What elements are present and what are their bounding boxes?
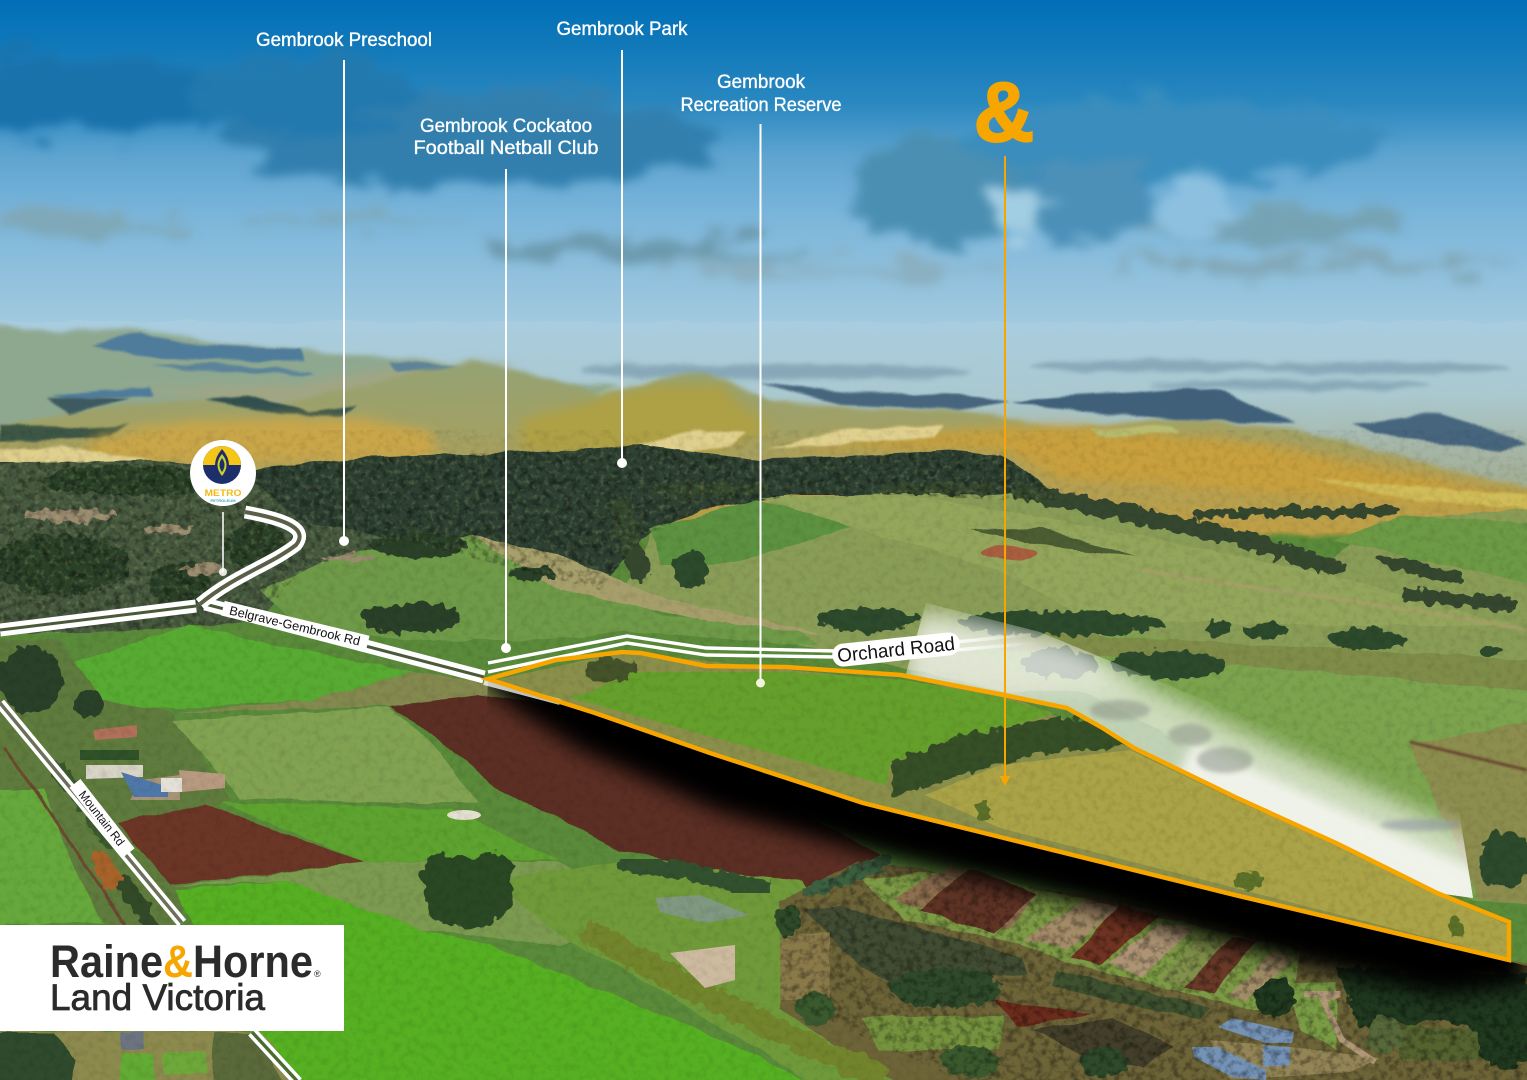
creek lines	[1140, 570, 1527, 770]
site boundary outline	[488, 652, 1509, 960]
right upper paddock	[1335, 515, 1527, 585]
brown field small	[118, 805, 364, 885]
lower right pasture	[960, 633, 1527, 905]
roadside trees	[60, 770, 150, 922]
garden texture	[780, 850, 1527, 1080]
callout: Gembrook Recreation Reserve: Recreation Reserve	[680, 95, 842, 116]
poplar tree line	[585, 928, 885, 1078]
south land under logo	[0, 1031, 300, 1080]
logo subtitle: Land Victoria	[50, 977, 265, 1018]
logo registered mark: ®	[314, 969, 321, 979]
black shadow under site boundary	[460, 650, 1527, 995]
nursery base ground	[780, 860, 1527, 1080]
Metro Petroleum pin	[190, 440, 256, 576]
olive band between fields	[171, 862, 640, 945]
distant forest	[240, 445, 1060, 590]
bright golden ridge	[70, 385, 1527, 510]
icon: Metro Petroleum logo: PETROLEUM	[210, 498, 236, 503]
plot trees	[584, 658, 1463, 936]
sky	[0, 0, 1527, 345]
striped crop beds	[894, 865, 1294, 1000]
dark trees lower right	[775, 905, 1527, 1078]
pasture lighter band	[760, 494, 1510, 625]
farm buildings	[1192, 1018, 1294, 1080]
fogged trees inside white fade	[1090, 700, 1460, 831]
white fade above site boundary	[905, 603, 1480, 905]
distant haze plains	[0, 322, 1527, 532]
plot olive paddock	[925, 750, 1508, 958]
callout: Gembrook Preschool	[256, 30, 432, 546]
village trees and houses	[0, 465, 558, 718]
Raine & Horne ampersand marker with arrow: &	[974, 65, 1034, 159]
south west field	[0, 790, 104, 925]
plot fence strip	[495, 652, 1510, 960]
south left trees	[0, 1033, 75, 1080]
golden foothills	[0, 362, 1527, 535]
callout: Gembrook Recreation Reserve: Gembrook	[717, 72, 805, 93]
north curve road	[200, 512, 300, 604]
right hillside pasture	[620, 492, 1527, 700]
bright green paddock	[45, 625, 412, 712]
fine photo grain	[0, 430, 1527, 1080]
green strip around crop beds	[861, 870, 1300, 1010]
forest canopy texture	[0, 446, 1056, 634]
green paddock centre	[650, 500, 860, 565]
distant land and foothills	[0, 322, 1527, 535]
tree line by brown field	[805, 858, 890, 892]
hill shadows left	[50, 331, 460, 400]
rolling field behind road	[260, 535, 820, 645]
far left hills	[0, 325, 620, 440]
strip along Belgrave road	[170, 625, 570, 712]
icon: Metro Petroleum logo	[203, 446, 242, 503]
south shed	[120, 1032, 143, 1049]
road label: Mountain Rd: Mountain Rd	[76, 788, 127, 849]
clouds	[0, 55, 1510, 277]
dark ploughed slot	[970, 528, 1135, 556]
terrain fields	[0, 445, 1527, 1080]
callout: Gembrook Cockatoo Football Netball Club	[414, 116, 598, 653]
fawn corner paddock	[1410, 720, 1527, 905]
pale paddocks	[0, 425, 1527, 510]
tree belt on the ridge	[620, 488, 1510, 605]
dam	[655, 895, 750, 923]
blue hill	[1012, 388, 1295, 423]
callout: Gembrook Cockatoo Football Netball Club: Gembrook Cockatoo	[420, 116, 592, 137]
west road	[0, 606, 196, 630]
bright green lower field	[175, 880, 815, 1080]
road label: Orchard Road: Orchard Road	[836, 634, 956, 667]
callout: Gembrook Park: Gembrook Park	[556, 19, 688, 40]
callout: Gembrook Recreation Reserve	[680, 72, 842, 688]
Belgrave-Gembrook Rd road line	[205, 604, 560, 702]
nursery rows	[804, 907, 1480, 1067]
upper right pasture band	[1000, 630, 1527, 692]
Orchard Road line	[488, 634, 1035, 672]
roadside track	[4, 747, 125, 923]
road label: Mountain Rd	[69, 779, 135, 857]
logo panel: Raine & Horne Land Victoria	[0, 925, 344, 1031]
callout: Gembrook Cockatoo Football Netball Club: Football Netball Club	[414, 138, 598, 159]
tree clumps right field	[672, 552, 1527, 888]
large tree clump	[420, 852, 514, 929]
west strip ground	[0, 640, 230, 930]
hill shadows mid	[0, 383, 1527, 452]
callout: Gembrook Preschool: Gembrook Preschool	[256, 30, 432, 51]
south small fields	[120, 1053, 155, 1080]
mid green paddock	[221, 803, 560, 862]
logo wordmark: Raine&Horne	[50, 936, 313, 987]
south central field	[490, 860, 1000, 1080]
Mountain Rd road line	[0, 703, 298, 1080]
south small field two	[163, 1050, 207, 1075]
tan slopes	[120, 365, 520, 420]
village hillside	[0, 460, 480, 635]
west paddock	[171, 707, 479, 803]
small dam	[447, 810, 481, 820]
tree line by dam	[620, 862, 770, 890]
farm yard	[1210, 1040, 1380, 1080]
road label: Belgrave-Gembrook Rd: Belgrave-Gembrook Rd	[228, 604, 362, 648]
callout: Gembrook Park	[556, 19, 688, 468]
brown field big	[390, 695, 880, 895]
Raine & Horne ampersand marker with arrow	[974, 65, 1034, 786]
icon: Metro Petroleum logo: METRO	[204, 488, 242, 499]
plot tree row	[891, 717, 1130, 797]
tan slope	[470, 535, 830, 635]
distant plains shadows	[580, 360, 1510, 390]
farm track	[1304, 994, 1375, 1062]
ground patches lower right	[780, 933, 1337, 1050]
red soil patch	[982, 546, 1038, 560]
dam pale	[670, 945, 735, 988]
plot green paddock	[568, 672, 1054, 785]
farm yard and sheds	[80, 725, 225, 800]
main roads	[0, 512, 560, 702]
south trees by road	[213, 1033, 285, 1080]
